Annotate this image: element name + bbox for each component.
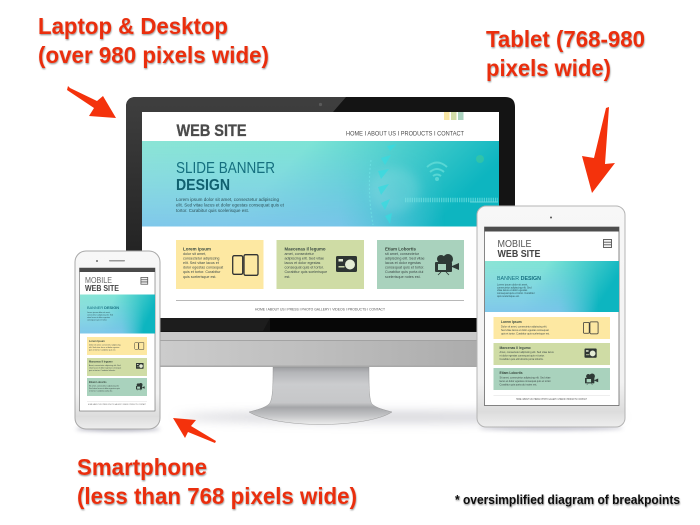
monitor bezel xyxy=(126,97,515,332)
phone card 2: vitae lacus et dolor egestas consequat xyxy=(89,366,122,370)
card: lorem ipsum: dolor egestas consequat xyxy=(183,266,223,270)
phone card 1: Lorem Ipsum xyxy=(89,340,105,343)
tablet banner: BANNER DESIGN xyxy=(497,276,541,282)
tablet card 3: lacus et dolor egestas consequat quis et tortor. xyxy=(500,380,552,383)
phone banner xyxy=(80,294,155,334)
phone banner: vitae lacus et dolor egestas xyxy=(87,316,110,319)
card: etiam lobortis: scelerisque notes est. xyxy=(385,275,421,279)
label: smartphone: (less than 768 pixels wide) xyxy=(77,483,357,509)
phone card 1: Dolor sit amet, consectetur adipiscing xyxy=(89,344,120,346)
phone banner: Lorem ipsum dolor sit amet, xyxy=(87,311,111,314)
footer nav: HOME I ABOUT US I PRESS I PHOTO GALLERY I VIDEOS I PRODUCTS I CONTACT xyxy=(255,308,386,312)
card: maecenas: est. xyxy=(284,275,290,279)
label: laptop and desktop: Laptop & Desktop xyxy=(38,13,228,39)
footnote: * oversimplified diagram of breakpoints xyxy=(455,492,680,507)
card: maecenas: amet, consectetur xyxy=(284,252,315,256)
icon: video camera xyxy=(435,254,459,275)
tablet footer nav: HOME I ABOUT US I PRESS I PHOTO GALLERY I VIDEOS I PRODUCTS I CONTACT xyxy=(516,398,587,401)
tablet xyxy=(477,206,625,430)
phone card 1: elit. Sed vitae lacus et dolor egestas xyxy=(89,346,119,349)
card: lorem ipsum: consectetur adipiscing xyxy=(183,256,220,260)
label: smartphone xyxy=(77,454,357,509)
tablet card 2: Maecenas Il legumo xyxy=(500,346,531,350)
tablet card 1: Lorem Ipsum xyxy=(501,320,522,324)
card: etiam lobortis: Curabitur quis porta dui xyxy=(385,270,424,274)
phone body xyxy=(75,251,160,429)
tablet banner: consequat quis et tortor. Curabitur xyxy=(497,292,535,295)
nav menu: HOME I ABOUT US I PRODUCTS I CONTACT xyxy=(346,130,464,138)
card: etiam lobortis: adipiscing elit. Sed vitae xyxy=(385,256,425,260)
monitor chin xyxy=(126,331,515,367)
card: maecenas xyxy=(276,240,364,289)
tablet screen xyxy=(484,227,619,406)
phone title: MOBILE xyxy=(85,276,112,285)
monitor screen xyxy=(142,112,499,318)
tablet card 3: Curabitur quis porta dui notes est. xyxy=(500,384,537,386)
phone screen xyxy=(80,268,155,411)
card: etiam lobortis: lacus et dolor egestas xyxy=(385,261,421,265)
card: lorem ipsum: quis et tortor. Curabitur xyxy=(183,270,221,274)
banner copy: Lorem ipsum dolor sit amet, consectetur adipiscing xyxy=(176,197,279,202)
phone card 2: quis et tortor. Curabitur lobortis. xyxy=(89,369,116,372)
tablet card 3: Etiam Lobortis xyxy=(500,371,523,375)
site title: WEB SITE xyxy=(176,121,246,140)
ground shadow xyxy=(175,411,625,423)
phone card 1 xyxy=(87,337,147,355)
tablet banner xyxy=(485,261,619,312)
phone banner: BANNER DESIGN xyxy=(87,305,119,310)
tablet screen: WEB SITE xyxy=(498,249,541,260)
label: laptop and desktop xyxy=(38,13,269,68)
card: lorem ipsum: Lorem Ipsum xyxy=(183,246,211,252)
phone banner: consectetur adipiscing elit. Sed xyxy=(87,314,113,316)
tablet banner: vitae lacus et dolor egestas xyxy=(497,289,528,292)
label: smartphone: Smartphone xyxy=(77,454,207,480)
banner decoration xyxy=(369,144,498,225)
tablet card 2: Amet, consectetur adipiscing elit. Sed vitae lacus xyxy=(500,351,554,354)
phone card 3: et tortor. Curabitur porta dui. xyxy=(89,390,113,392)
card: maecenas: adipiscing elit. Sed vitae xyxy=(284,256,324,260)
phone card 2: Maecenas Il legumo xyxy=(89,360,113,364)
monitor stand xyxy=(249,367,392,424)
tablet menu icon xyxy=(604,240,612,248)
phone card 1: quis et tortor. Curabitur quis est. xyxy=(89,348,116,352)
card: lorem ipsum: elit. Sed vitae lacus et xyxy=(183,261,219,265)
label: laptop and desktop: (over 980 pixels wide) xyxy=(38,42,269,68)
banner copy: elit. Sed vitae lacus et dolor egestas consequat quis et xyxy=(176,202,285,208)
icon: devices xyxy=(233,255,258,275)
banner copy xyxy=(176,197,285,213)
tablet card 1 xyxy=(494,317,610,339)
arrow: to tablet xyxy=(582,107,615,193)
tablet card 1: quis et tortor. Curabitur quis scelerisque est. xyxy=(501,332,550,336)
label: tablet xyxy=(486,26,645,81)
label: tablet: pixels wide) xyxy=(486,55,611,81)
card: etiam lobortis xyxy=(377,240,464,289)
tablet banner: quis scelerisque est. xyxy=(497,295,520,298)
card: maecenas: consequat quis et tortor. xyxy=(284,266,324,270)
phone menu icon xyxy=(141,277,148,284)
phone screen: WEB SITE xyxy=(85,284,119,293)
banner heading: SLIDE BANNER xyxy=(176,160,275,177)
tablet banner: Lorem ipsum dolor sit amet, xyxy=(497,284,528,286)
card: lorem ipsum: quis scelerisque est. xyxy=(183,275,216,279)
phone card 3: Sed vitae lacus et dolor egestas quis xyxy=(89,387,120,390)
label: tablet: Tablet (768-980 xyxy=(486,26,645,52)
card: etiam lobortis: consequat quis et tortor. xyxy=(385,266,424,270)
tablet card 2 xyxy=(494,343,610,365)
tablet body xyxy=(477,206,625,427)
arrow: to smartphone xyxy=(173,418,216,443)
smartphone xyxy=(75,251,160,431)
phone card 2 xyxy=(87,358,147,376)
wifi icon xyxy=(427,162,447,180)
card: maecenas: Maecenas Il legumo xyxy=(284,246,326,252)
card: maecenas: Curabitur quis scelerisque xyxy=(284,270,327,274)
tablet card 2: Curabitur quis elit lobortis porta lobortis. xyxy=(500,358,544,361)
banner copy: tortor. Curabitur quis scelerisque est. xyxy=(176,208,249,213)
tablet card 2: et dolor egestas consequat quis et tortor. xyxy=(500,354,545,358)
tablet card 3 xyxy=(494,368,610,390)
phone card 3: Sit amet, consectetur adipiscing elit. xyxy=(89,384,120,388)
card: lorem ipsum: dolor sit amet, xyxy=(183,252,206,256)
phone card 2: Amet, consectetur adipiscing elit. Sed xyxy=(89,364,121,367)
tablet banner: consectetur adipiscing elit. Sed xyxy=(497,286,532,290)
phone banner: consequat quis et tortor. xyxy=(87,318,108,322)
arrow: to desktop xyxy=(67,86,116,118)
card: etiam lobortis: Etiam Lobortis xyxy=(385,246,417,252)
banner: DESIGN xyxy=(176,177,230,194)
card: etiam lobortis: sit amet, consectetur xyxy=(385,252,420,256)
phone footer nav: HOME I ABOUT US I PRESS I PHOTO GALLERY I VIDEOS I PRODUCTS I CONTACT xyxy=(88,403,147,406)
desktop monitor xyxy=(126,97,515,424)
tablet card 1: Dolor sit amet, consectetur adipiscing elit. xyxy=(501,326,547,328)
phone card 3 xyxy=(87,378,147,396)
icon: camera xyxy=(336,256,357,272)
card: maecenas: lacus et dolor egestas xyxy=(284,261,321,265)
phone card 3: Etiam Lobortis xyxy=(89,381,107,384)
banner xyxy=(142,141,499,226)
tablet title: MOBILE xyxy=(498,239,532,250)
tablet card 3: Sit amet, consectetur adipiscing elit. Sed vitae xyxy=(500,376,551,380)
card: lorem ipsum xyxy=(176,240,264,289)
tablet card 1: Sed vitae lacus et dolor egestas consequat xyxy=(501,329,549,332)
accent tabs xyxy=(444,112,464,120)
